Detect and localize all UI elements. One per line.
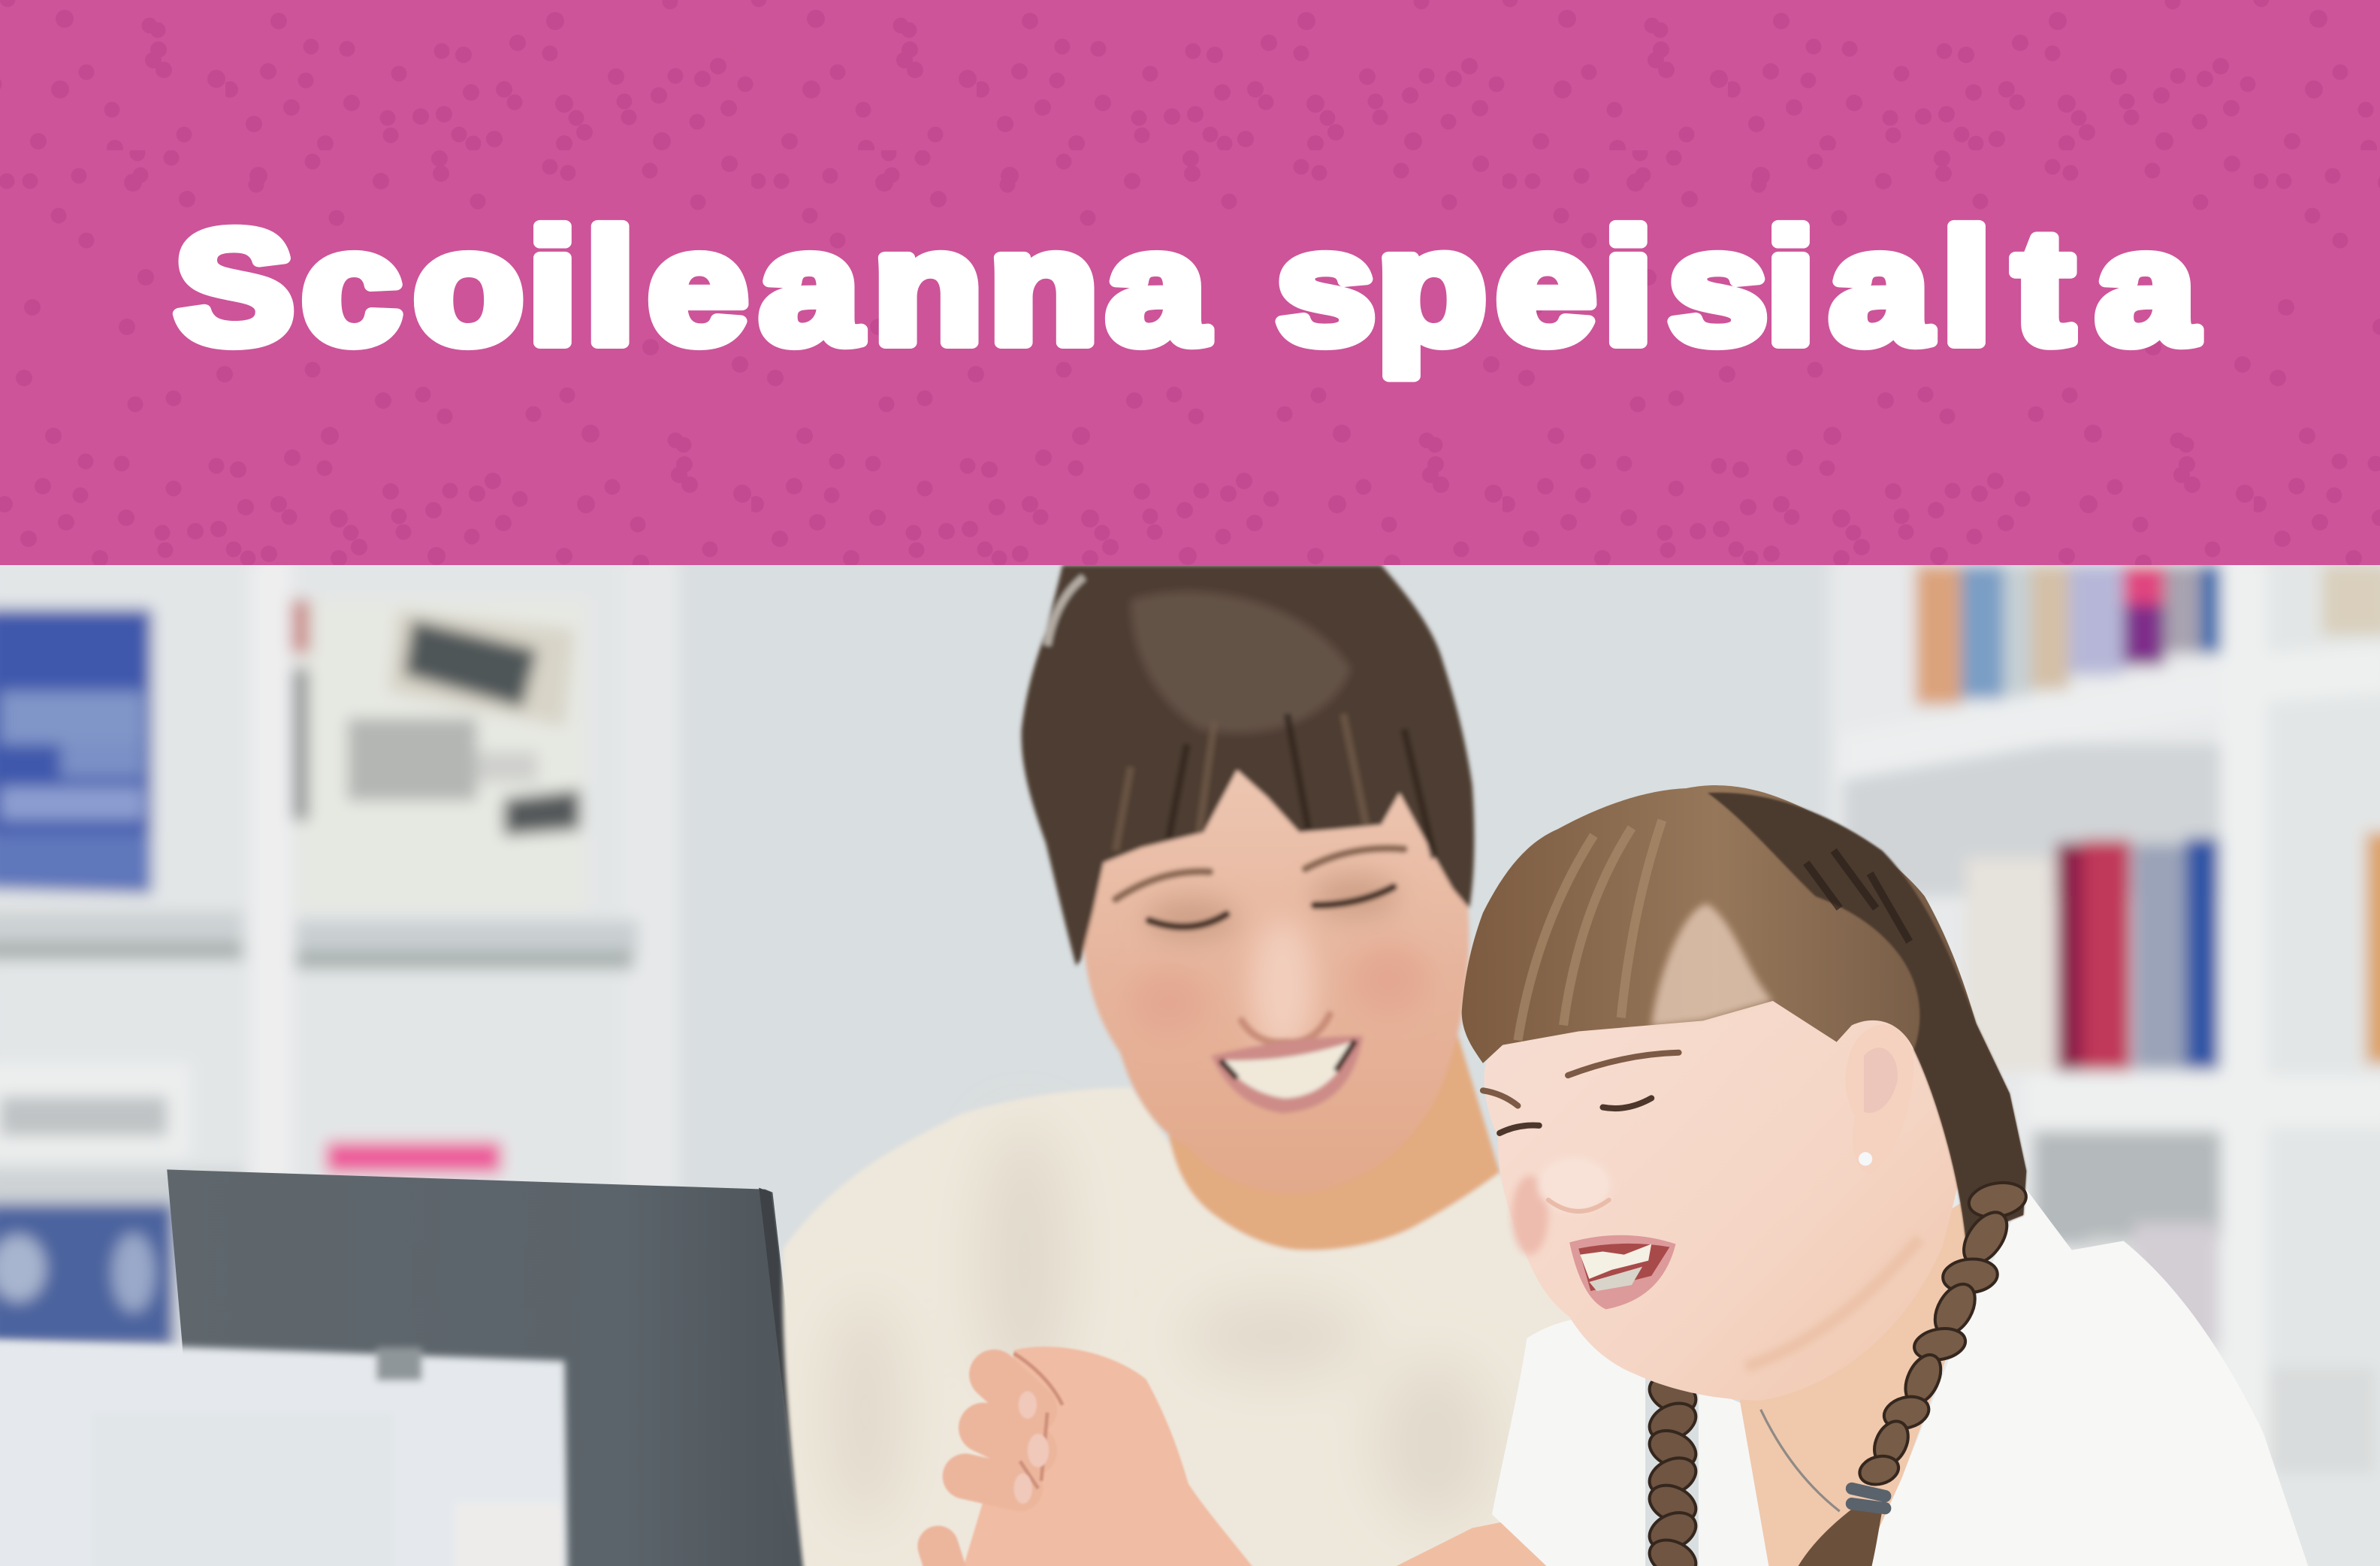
hair tie bbox=[1852, 1489, 1885, 1508]
pupil bbox=[1382, 785, 2310, 1566]
teacher's eyes and brows bbox=[1116, 848, 1404, 1042]
pupil's face bbox=[1484, 911, 1965, 1401]
photo: teacher and pupil at a laptop bbox=[0, 555, 2380, 1566]
pupil's hand bbox=[938, 1347, 1257, 1566]
title bbox=[174, 198, 2197, 377]
necklace bbox=[1761, 1410, 1840, 1511]
pupil's right braid bbox=[1856, 1178, 2029, 1489]
teacher bbox=[783, 565, 1586, 1566]
pupil's left braid bbox=[1644, 1369, 1702, 1566]
fingers bbox=[938, 1374, 1032, 1566]
banner background bbox=[0, 0, 2380, 565]
title: Scoileanna bbox=[174, 198, 1208, 377]
foreground translucent box bbox=[0, 1340, 568, 1566]
teacher's smile bbox=[1211, 1036, 1363, 1114]
teacher's hair bbox=[1022, 565, 1474, 966]
teacher's neck bbox=[1166, 1032, 1500, 1250]
pupil's shirt bbox=[1492, 1318, 1645, 1566]
pupil's eyes and brows bbox=[1483, 1053, 1679, 1211]
teacher's face bbox=[1083, 752, 1469, 1194]
banner dot texture bbox=[0, 150, 2380, 565]
pupil's smile bbox=[1569, 1235, 1676, 1309]
pupil's hair bbox=[1462, 785, 2026, 1238]
pupil's arm bbox=[1382, 1519, 1572, 1566]
teacher's sweater bbox=[783, 1087, 1586, 1566]
pupil's neck bbox=[1738, 1200, 1965, 1566]
laptop bbox=[167, 1169, 817, 1566]
title: speisialta bbox=[1276, 198, 2197, 377]
pupil's ear bbox=[1845, 1024, 1914, 1174]
photo background: wall and bookshelves bbox=[0, 555, 2380, 1566]
palm and wrist bbox=[962, 1347, 1257, 1566]
dark plait and pulled-back hair bbox=[1708, 793, 2026, 1238]
braid tail bbox=[1794, 1507, 1882, 1566]
pale scalp at the parting bbox=[1651, 904, 1773, 1026]
earring bbox=[1859, 1152, 1872, 1165]
title banner bbox=[0, 0, 2380, 565]
